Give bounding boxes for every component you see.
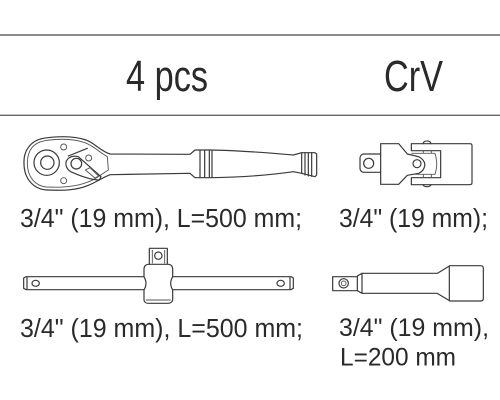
heading: quantity: 4 pcs [126, 52, 208, 101]
label: extension size and length [339, 314, 489, 372]
label: extension size and length: L=200 mm [340, 344, 456, 372]
icon: extension bar [333, 266, 483, 301]
icon: ratchet handle [24, 137, 317, 190]
icon: universal joint [360, 141, 472, 187]
label: extension size and length: 3/4" (19 mm), [339, 314, 489, 342]
label: ratchet size: 3/4" (19 mm), L=500 mm; [20, 205, 302, 233]
heading: material: CrV [384, 52, 444, 101]
label: T-bar size: 3/4" (19 mm), L=500 mm; [20, 315, 303, 343]
label: joint size: 3/4" (19 mm); [339, 205, 488, 233]
icon: sliding T-bar [24, 248, 293, 303]
